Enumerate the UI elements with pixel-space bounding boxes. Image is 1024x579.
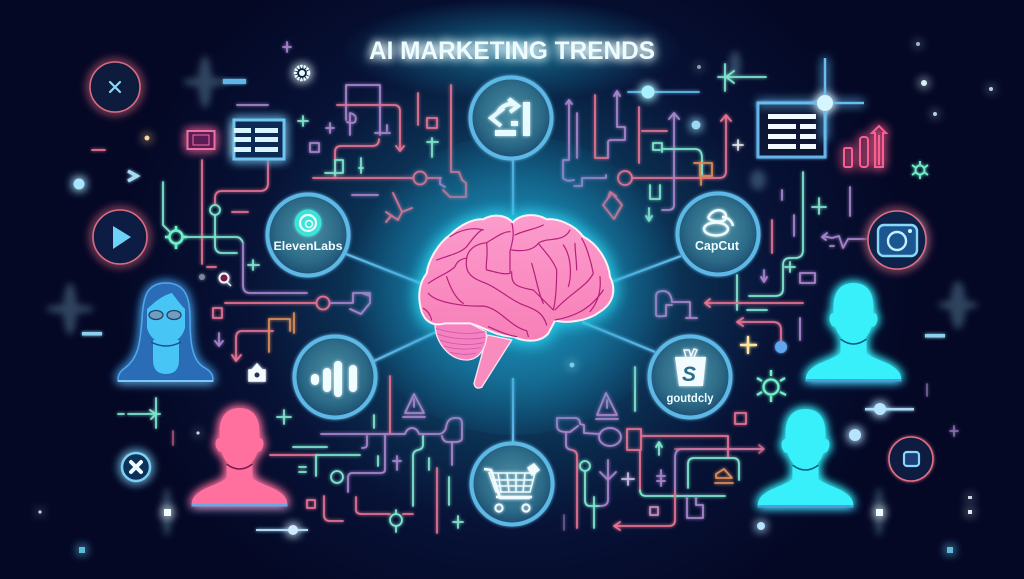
icon: grey dot: [199, 274, 205, 280]
icon: table right: [758, 103, 825, 157]
label: ElevenLabs: ElevenLabs: [274, 239, 343, 253]
icon: cancel badge lower left: [122, 453, 150, 481]
hub: CapCut: [678, 194, 758, 274]
icon: magnifier: [220, 274, 231, 286]
circuit wires: upper left: [237, 42, 466, 222]
starburst on right table: [757, 58, 864, 140]
hub: shopping cart: [472, 444, 552, 524]
icon: stop badge: [889, 437, 933, 481]
icon: AI arrow symbol: [491, 99, 530, 136]
icon: rising bars: [844, 126, 886, 167]
icon: CapCut logo: [704, 210, 733, 236]
hub: ElevenLabs: [268, 194, 348, 276]
brain halo: [350, 135, 680, 435]
label: goutdcly: goutdcly: [666, 393, 714, 405]
circuit wires: lower left: [118, 376, 463, 533]
icon: mint gear left: [165, 226, 187, 249]
person: cyan silhouette upper right: [806, 283, 902, 382]
spokes connecting brain to hubs: [346, 158, 681, 444]
label: CapCut: CapCut: [695, 239, 740, 253]
hub: top AI: [470, 78, 552, 158]
brain folds: [423, 223, 603, 337]
icon: ElevenLabs logo: [294, 210, 322, 236]
circuit wires: mid right: [656, 172, 866, 353]
hub: Shopify: [650, 336, 730, 418]
icon: house basket: [249, 364, 265, 381]
icon: mint sun gear: [757, 370, 786, 402]
icon: camera badge: [868, 211, 926, 269]
person: pink silhouette: [192, 408, 288, 506]
icon: chevron: [128, 171, 137, 181]
circuit wires: upper right: [563, 64, 766, 221]
icon: play circle: [93, 210, 147, 264]
circuit wires: lower right: [557, 367, 958, 530]
icon: cart: [484, 464, 539, 512]
title: AI MARKETING TRENDS: [369, 37, 655, 65]
icon: waveform bars: [311, 361, 357, 397]
icon: small pink frame: [188, 131, 214, 149]
icon: blue node dot: [775, 341, 787, 353]
icon: mint gear upper right: [912, 161, 928, 179]
blurred background sparkles: [46, 51, 978, 536]
icon: gear top: [296, 66, 308, 80]
sliders and short dashes: [82, 79, 945, 531]
hub: audio waveform: [294, 336, 376, 418]
icon: shopping bag: S: [682, 363, 696, 386]
brain: [419, 215, 613, 388]
person: cyan silhouette lower right: [758, 409, 854, 508]
icon: close circle top left: [90, 62, 140, 112]
circuit wires: mid left: [92, 150, 370, 361]
icon: table left: [234, 120, 284, 159]
person: woman with glasses: [118, 283, 213, 381]
